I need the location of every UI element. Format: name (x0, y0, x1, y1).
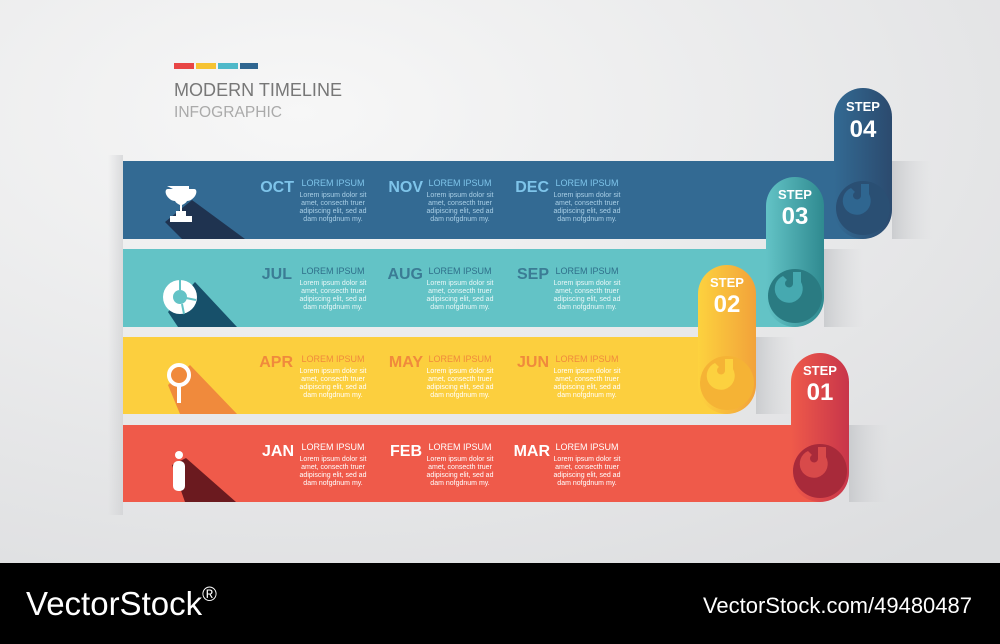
month texts: LOREM IPSUM (301, 442, 365, 452)
month texts: LOREM IPSUM (301, 266, 365, 276)
month texts: Lorem ipsum dolor sit (554, 192, 621, 199)
month texts: Lorem ipsum dolor sit (427, 280, 494, 287)
footer bar: VectorStock.com/49480487 (703, 593, 972, 618)
month texts: LOREM IPSUM (555, 354, 619, 364)
month texts: NOV (388, 179, 423, 196)
month texts: MAR (514, 443, 550, 460)
month texts: amet, consecth truer (555, 288, 620, 295)
band: step 02 yellow: STEP (710, 275, 744, 290)
month texts: amet, consecth truer (428, 464, 493, 471)
month texts: LOREM IPSUM (301, 354, 365, 364)
month texts: adipiscing elit, sed ad (554, 208, 621, 215)
month texts: JAN (262, 443, 294, 460)
footer bar: VectorStock (26, 585, 202, 622)
month texts: MAY (389, 354, 423, 371)
month texts: dam nofgdnum my. (303, 480, 363, 487)
band: step 04 blue (123, 88, 932, 239)
band: step 02 yellow: 02 (714, 291, 740, 318)
month texts: Lorem ipsum dolor sit (300, 280, 367, 287)
month texts: dam nofgdnum my. (303, 304, 363, 311)
month texts: adipiscing elit, sed ad (554, 296, 621, 303)
month texts: amet, consecth truer (301, 288, 366, 295)
month texts: amet, consecth truer (428, 200, 493, 207)
month texts: amet, consecth truer (428, 288, 493, 295)
band: step 03 teal (123, 177, 864, 327)
title: INFOGRAPHIC (174, 104, 282, 121)
month texts: LOREM IPSUM (428, 354, 492, 364)
month texts: LOREM IPSUM (555, 266, 619, 276)
color bar (174, 63, 258, 69)
month texts: Lorem ipsum dolor sit (554, 456, 621, 463)
month texts: adipiscing elit, sed ad (300, 384, 367, 391)
band: step 01 red: STEP (803, 363, 837, 378)
month texts: adipiscing elit, sed ad (300, 208, 367, 215)
band: step 01 red (123, 353, 889, 502)
month texts: LOREM IPSUM (428, 442, 492, 452)
month texts: LOREM IPSUM (301, 178, 365, 188)
month texts: amet, consecth truer (555, 376, 620, 383)
month texts: Lorem ipsum dolor sit (427, 456, 494, 463)
band: step 02 yellow (123, 265, 796, 414)
month texts: adipiscing elit, sed ad (300, 472, 367, 479)
band: step 04 blue: STEP (846, 99, 880, 114)
month texts: amet, consecth truer (301, 200, 366, 207)
month texts: amet, consecth truer (555, 464, 620, 471)
month texts: adipiscing elit, sed ad (427, 472, 494, 479)
month texts: amet, consecth truer (428, 376, 493, 383)
month texts: LOREM IPSUM (555, 178, 619, 188)
month texts: dam nofgdnum my. (430, 304, 490, 311)
month texts: Lorem ipsum dolor sit (554, 280, 621, 287)
month texts: dam nofgdnum my. (430, 480, 490, 487)
month texts: adipiscing elit, sed ad (427, 384, 494, 391)
month texts: dam nofgdnum my. (557, 216, 617, 223)
month texts: dam nofgdnum my. (557, 392, 617, 399)
band: step 03 teal: 03 (782, 203, 808, 230)
month texts: AUG (387, 266, 423, 283)
band: step 01 red: 01 (807, 379, 833, 406)
month texts: dam nofgdnum my. (303, 392, 363, 399)
month texts: adipiscing elit, sed ad (300, 296, 367, 303)
month texts: Lorem ipsum dolor sit (300, 192, 367, 199)
month texts: JUL (262, 266, 292, 283)
month texts: adipiscing elit, sed ad (427, 208, 494, 215)
month texts: JUN (517, 354, 549, 371)
month texts: dam nofgdnum my. (557, 480, 617, 487)
band: step 03 teal: STEP (778, 187, 812, 202)
title (174, 80, 342, 121)
month texts: SEP (517, 266, 549, 283)
month texts: LOREM IPSUM (428, 266, 492, 276)
month texts: dam nofgdnum my. (430, 216, 490, 223)
month texts: adipiscing elit, sed ad (427, 296, 494, 303)
month texts: OCT (260, 179, 294, 196)
month texts: dam nofgdnum my. (557, 304, 617, 311)
month texts: Lorem ipsum dolor sit (300, 368, 367, 375)
month texts (259, 178, 621, 487)
month texts: dam nofgdnum my. (303, 216, 363, 223)
month texts: APR (259, 354, 293, 371)
month texts: adipiscing elit, sed ad (554, 384, 621, 391)
month texts: Lorem ipsum dolor sit (427, 192, 494, 199)
month texts: amet, consecth truer (555, 200, 620, 207)
month texts: Lorem ipsum dolor sit (554, 368, 621, 375)
month texts: dam nofgdnum my. (430, 392, 490, 399)
month texts: amet, consecth truer (301, 464, 366, 471)
month texts: adipiscing elit, sed ad (554, 472, 621, 479)
month texts: LOREM IPSUM (555, 442, 619, 452)
month texts: DEC (515, 179, 549, 196)
footer bar (0, 563, 1000, 644)
footer bar: ® (202, 584, 217, 606)
month texts: amet, consecth truer (301, 376, 366, 383)
band: step 04 blue: 04 (850, 116, 877, 143)
month texts: Lorem ipsum dolor sit (300, 456, 367, 463)
month texts: LOREM IPSUM (428, 178, 492, 188)
month texts: FEB (390, 443, 422, 460)
title: MODERN TIMELINE (174, 80, 342, 100)
month texts: Lorem ipsum dolor sit (427, 368, 494, 375)
